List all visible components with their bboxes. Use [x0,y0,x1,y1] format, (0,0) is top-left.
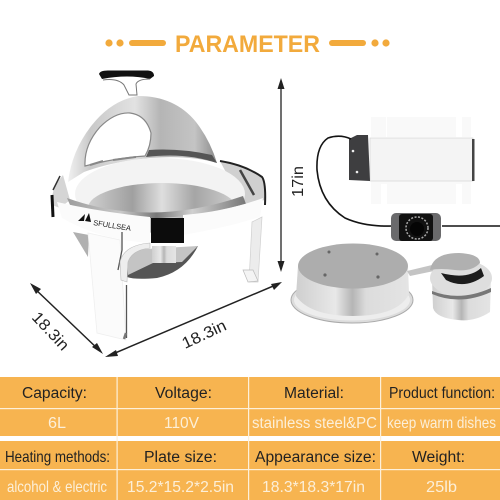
row 1 labels: Voltage: [155,385,212,402]
heater clip [349,135,370,181]
row 1 labels: Capacity: [22,385,87,402]
electric heating plate [317,117,500,241]
row 2 labels: Weight: [412,449,465,466]
row 1 labels [22,385,495,402]
height dimension arrow [278,78,284,272]
temperature controller [391,213,441,241]
row 2 labels [5,449,465,466]
title: PARAMETER [175,31,320,58]
row 1 labels: Material: [284,385,344,402]
front leg [88,232,150,340]
row 1 values: 110V [164,415,200,432]
specification table [0,377,500,500]
fuel holder [407,253,492,320]
row 2 labels: Plate size: [144,449,217,466]
lower basin [73,232,198,279]
heater body [370,138,473,181]
left and right side rail [52,161,265,217]
depth label: 18.3in [28,309,72,354]
dish handle [99,70,154,95]
row 2 values: 15.2*15.2*2.5in [127,479,234,496]
heater tabs [371,117,471,204]
chafing dish [52,70,265,340]
height label: 17in [290,166,307,197]
back leg [243,217,262,282]
title [105,31,390,58]
power cord [317,136,500,226]
brand logo [78,213,132,233]
brand logo: SFULLSEA [93,218,132,233]
row 1 values [48,415,496,432]
row 2 labels: Heating methods: [5,449,110,466]
row 2 values: 18.3*18.3*17in [262,479,365,496]
round water pan [291,244,413,323]
domed lid [68,96,217,182]
width dimension arrow [105,282,282,357]
row 1 values: 6L [48,415,66,432]
row 2 values: 25lb [426,479,457,496]
front frame band [57,198,263,243]
row 2 labels: Appearance size: [255,449,376,466]
black mirror panel [151,218,184,243]
row 2 values [7,479,457,496]
table background [0,377,500,500]
depth dimension arrow [30,283,103,354]
row 2 values: alcohol & electric [7,479,107,496]
heater end cap [472,139,474,181]
food pan [75,158,245,233]
row 1 values: stainless steel&PC [252,415,377,432]
width label: 18.3in [180,317,229,353]
chrome rim strip [67,196,246,218]
